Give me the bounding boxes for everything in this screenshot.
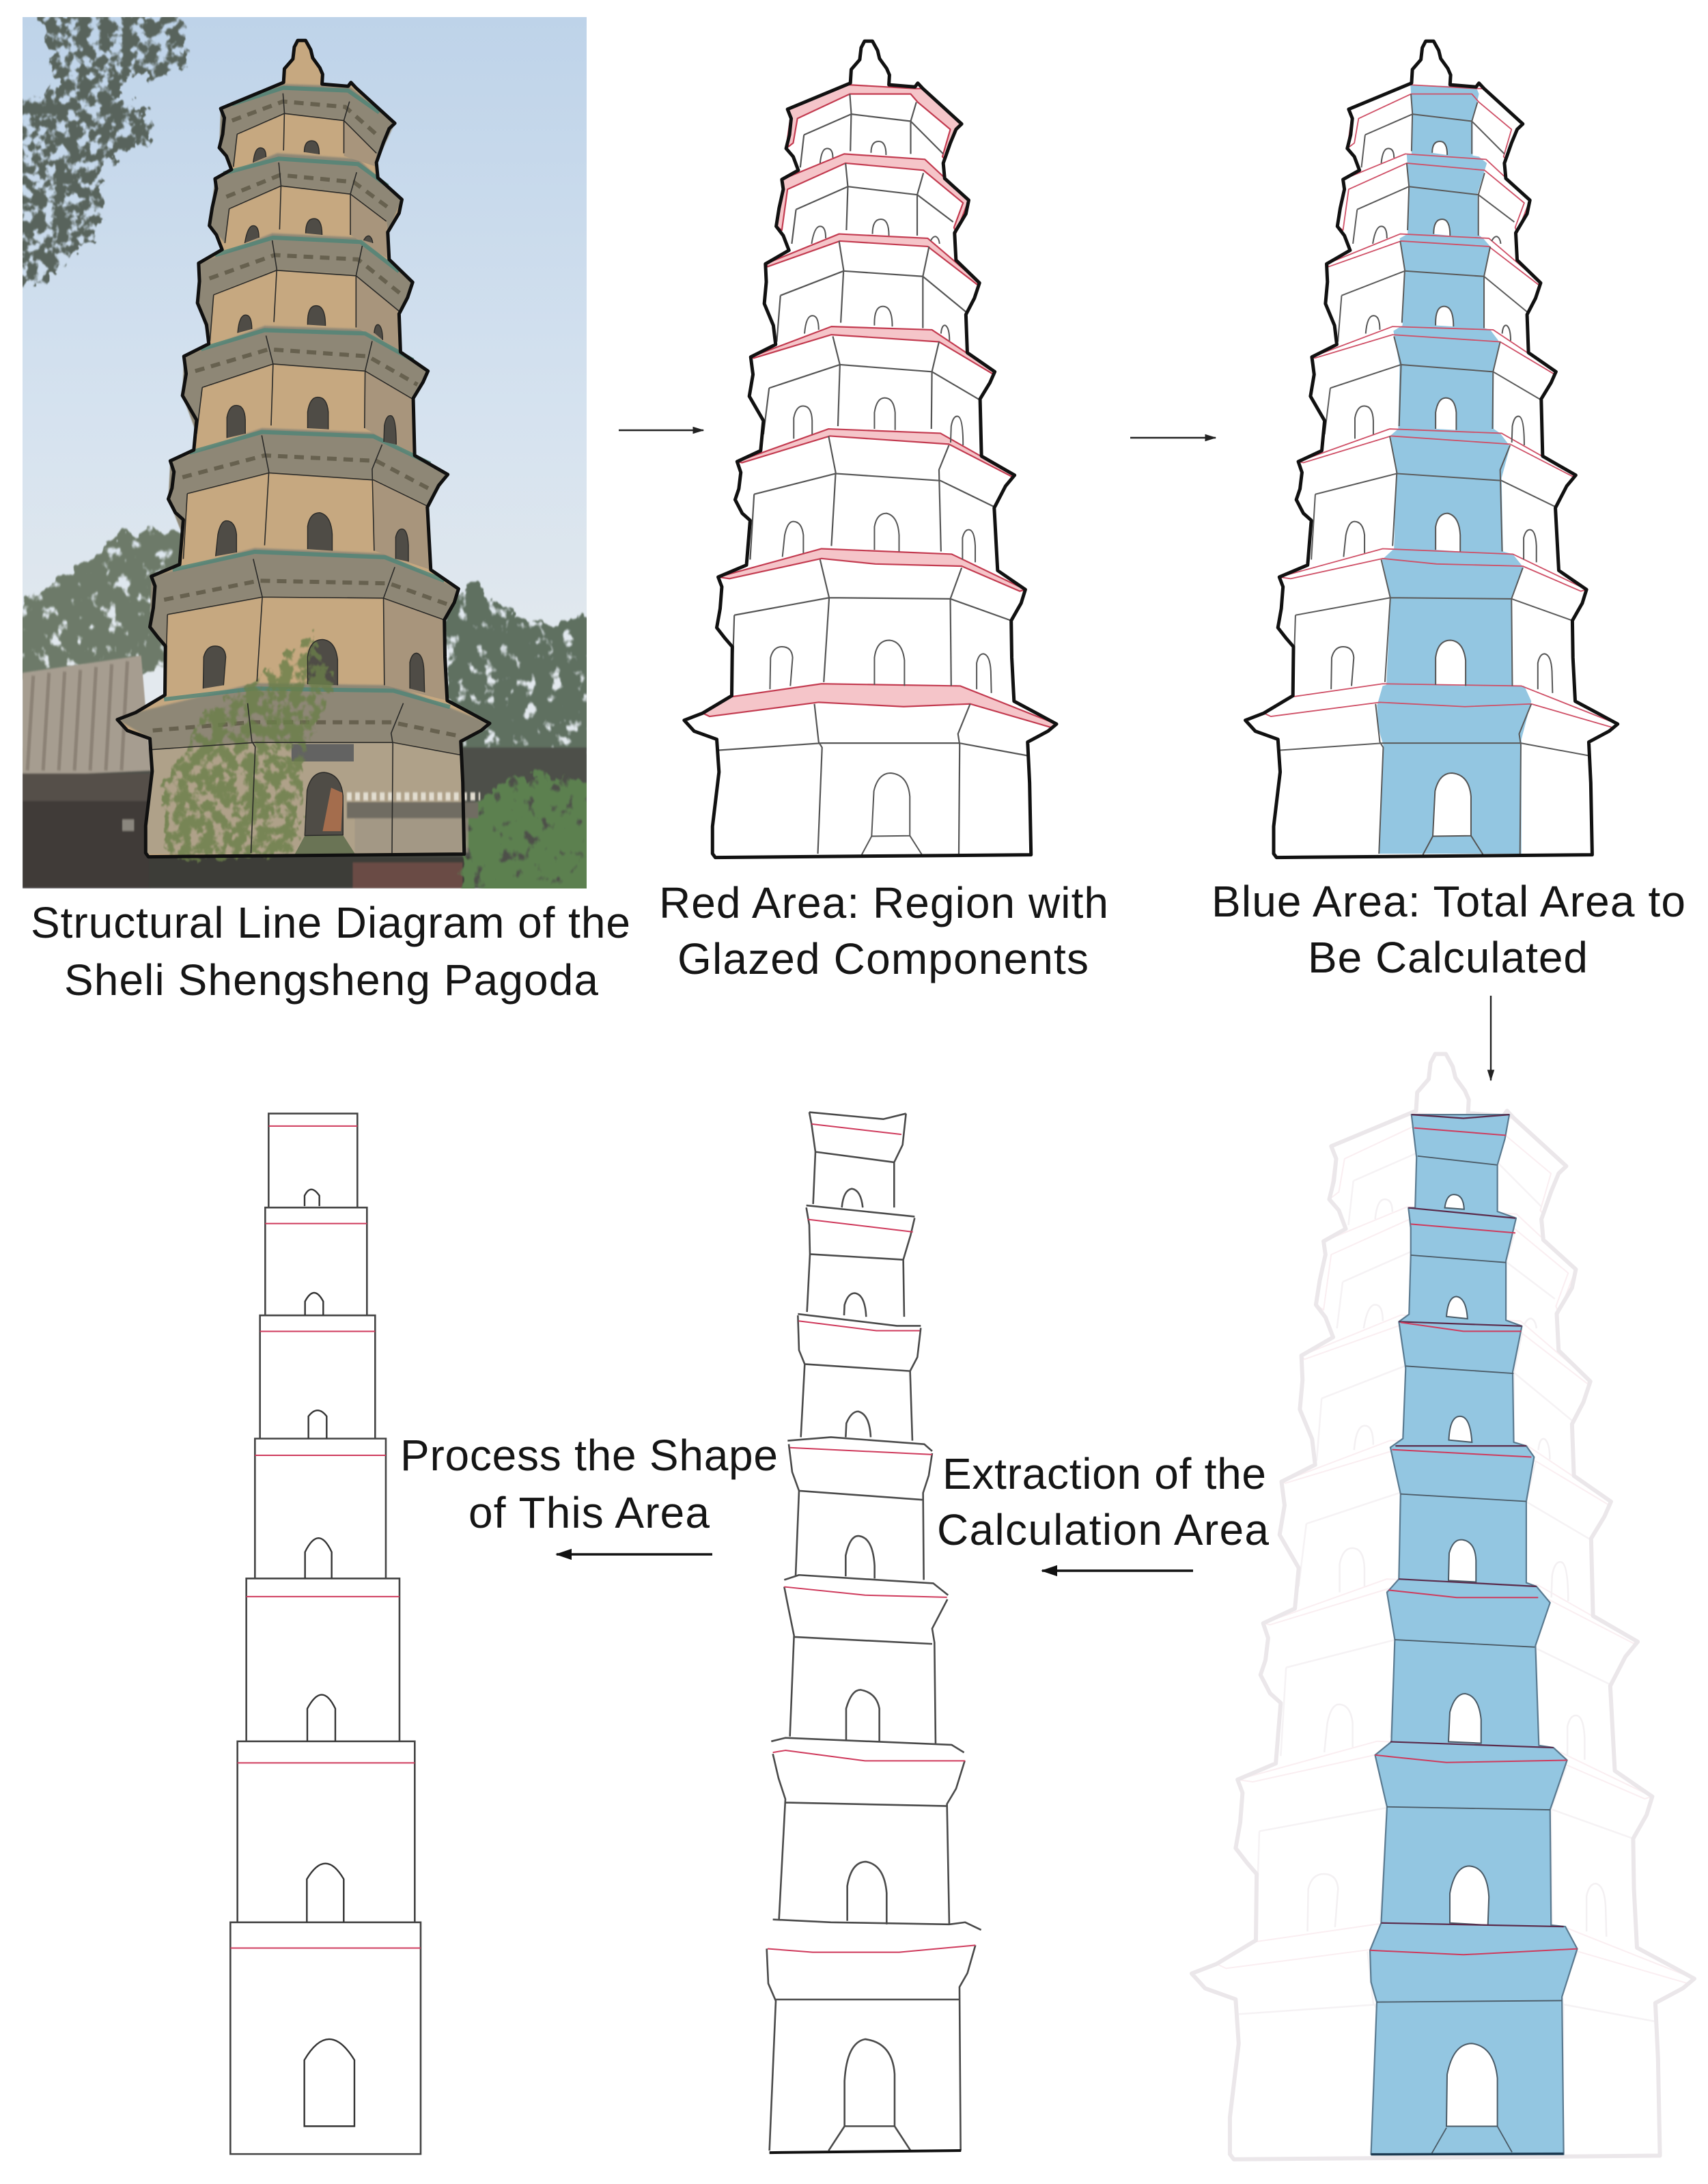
photo low eave in front of base <box>347 796 480 853</box>
photo roof tiles <box>27 661 128 770</box>
caption: red area: Glazed Components <box>677 934 1089 983</box>
panel: faded pagoda ghost <box>1192 1054 1694 2159</box>
pagoda outline <box>684 41 1056 858</box>
caption: process the shape: of This Area <box>468 1488 710 1537</box>
caption: blue area: Blue Area: Total Area to <box>1212 877 1685 926</box>
photo low background trees <box>16 529 592 817</box>
caption: process the shape: Process the Shape <box>400 1431 778 1480</box>
processed red lines <box>230 1126 421 1948</box>
caption: red area <box>659 878 1108 983</box>
caption: process the shape <box>400 1431 778 1537</box>
photo outline tracing <box>117 40 490 857</box>
blue calculation column <box>1377 85 1531 854</box>
panel: red area line diagram <box>684 41 1056 858</box>
extracted structure lines <box>767 1112 981 2151</box>
windows <box>770 141 992 837</box>
photo low buildings and ground <box>23 656 587 888</box>
caption: structural line diagram: Sheli Shengsheng Pagoda <box>64 955 598 1005</box>
door step <box>862 836 922 855</box>
inner lines of blue diagram <box>1280 94 1588 854</box>
panel: blue area line diagram <box>1246 41 1618 858</box>
arrow: photo to red diagram <box>619 430 703 431</box>
caption: blue area <box>1212 877 1685 982</box>
arrow: blue diagram down to extraction <box>1490 996 1492 1080</box>
ghost red bands <box>1216 1113 1694 1983</box>
center window openings <box>1432 141 1471 837</box>
blue column shape <box>1370 1115 1578 2155</box>
caption: extraction <box>937 1449 1269 1554</box>
panel: photograph with structural line overlay <box>16 12 592 897</box>
blue column gray lines <box>1377 1156 1562 2155</box>
extracted red lines <box>768 1124 975 1952</box>
processed windows <box>305 1190 354 2126</box>
ghost outline <box>1192 1054 1694 2159</box>
caption: structural line diagram <box>31 898 630 1005</box>
blue column top edges <box>1381 1115 1564 1927</box>
teal tiled roof strips <box>164 88 450 707</box>
step of blue diagram <box>1423 836 1483 855</box>
blue column window openings <box>1445 1194 1498 2127</box>
windows of blue diagram <box>1331 141 1552 837</box>
photo foreground foliage <box>160 632 333 860</box>
bracket shadow dashes <box>153 102 458 736</box>
caption: red area: Red Area: Region with <box>659 878 1108 927</box>
extracted base line <box>770 2151 961 2153</box>
outline of blue diagram <box>1246 41 1618 858</box>
panel: extracted line shape <box>767 1112 981 2153</box>
arrow: blue column to extraction <box>1042 1569 1193 1572</box>
ghost windows <box>1308 1190 1606 2131</box>
arrow: red diagram to blue diagram <box>1130 437 1216 438</box>
panel: extracted blue column <box>1370 1115 1578 2155</box>
photo pagoda masonry <box>117 40 490 857</box>
caption: blue area: Be Calculated <box>1308 933 1588 982</box>
ghost inner lines <box>1239 1125 1655 2154</box>
thin red band outlines <box>1263 85 1618 727</box>
blue column red lines <box>1370 1128 1578 1955</box>
panel: processed rectangular shape <box>230 1114 421 2154</box>
blue column base line <box>1371 2154 1564 2155</box>
photo green bush lower right <box>459 773 592 897</box>
window openings and lines <box>1246 41 1618 858</box>
photo upper left pine foliage <box>16 12 186 288</box>
inner structural lines <box>719 94 1028 854</box>
red glazed bands <box>703 85 1056 727</box>
caption: structural line diagram: Structural Line Diagram of the <box>31 898 630 947</box>
caption: extraction: Extraction of the <box>942 1449 1266 1498</box>
processed tiers <box>230 1114 421 2154</box>
photo sky <box>23 17 587 888</box>
caption: extraction: Calculation Area <box>937 1505 1269 1554</box>
arrow: extraction to processed shape <box>557 1553 712 1556</box>
